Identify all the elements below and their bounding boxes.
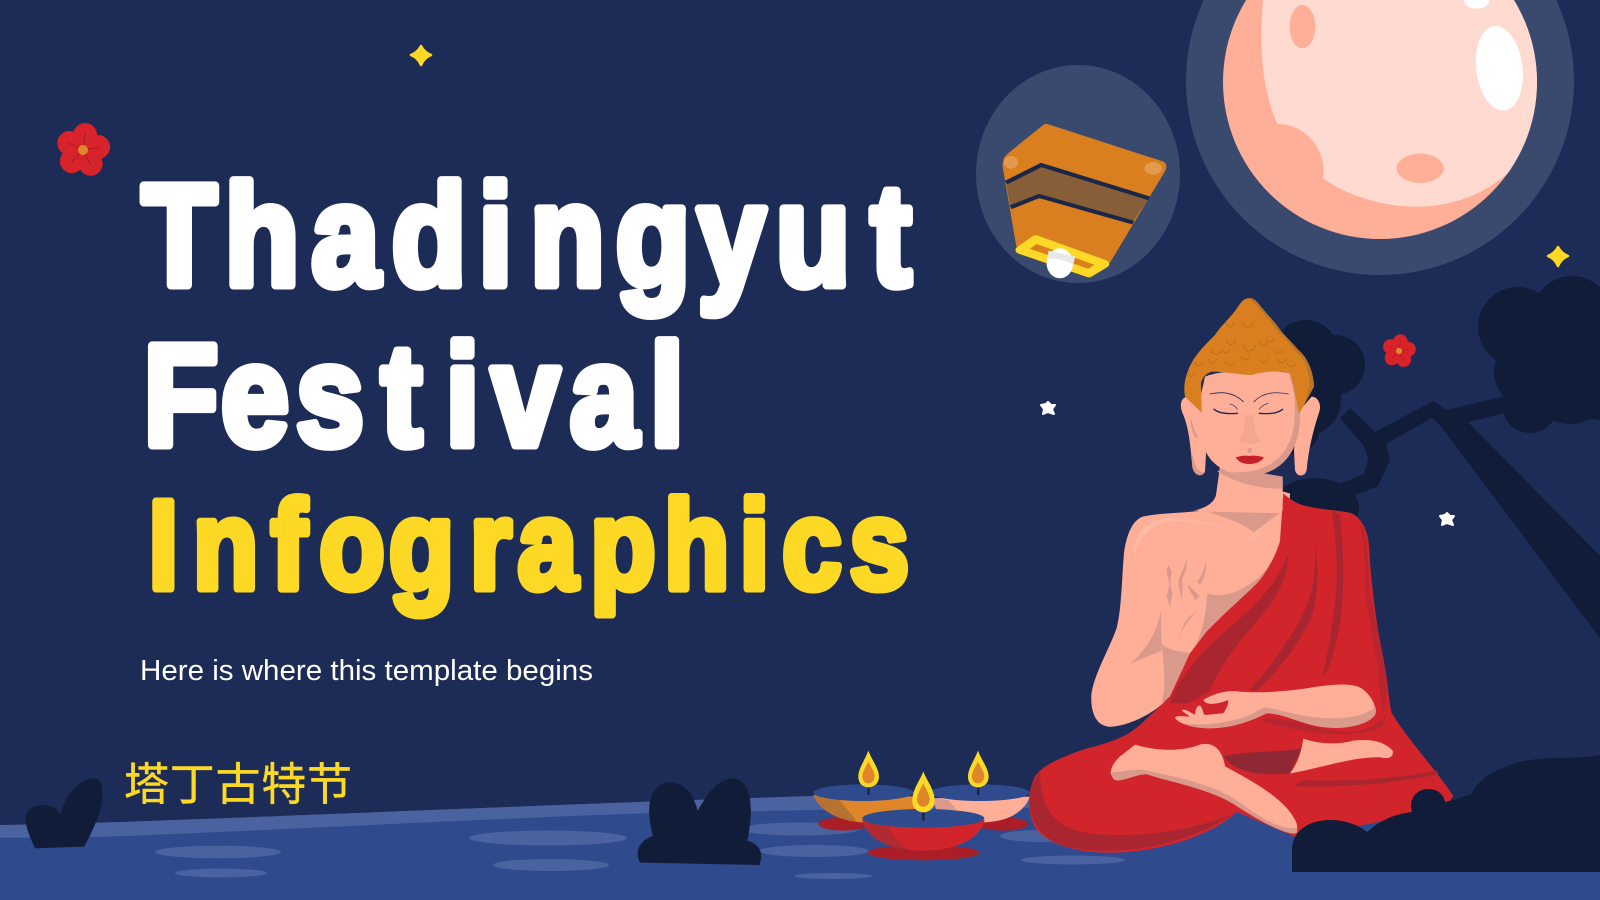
lips [1236, 456, 1264, 464]
lap hand and forearm [1175, 684, 1376, 728]
flower: top left [53, 120, 113, 178]
robe folds: chest drape [1170, 510, 1387, 734]
star: white right [1440, 513, 1454, 525]
robe fold: between legs [1223, 749, 1302, 774]
left leg and foot [1111, 744, 1297, 834]
oil lamps [813, 751, 1030, 860]
bush: left [26, 778, 103, 848]
nose [1238, 415, 1261, 444]
sparkle: yellow right [1548, 247, 1568, 266]
neck [1193, 467, 1283, 511]
bush: middle [638, 778, 761, 865]
subtitle: Here is where this template begins [140, 655, 593, 687]
title: line 3: Infographics [148, 474, 909, 615]
left ear [1181, 397, 1206, 475]
face [1198, 371, 1300, 476]
moon halo [1186, 0, 1574, 275]
hair [1184, 298, 1314, 414]
lamp: right pink [930, 751, 1030, 822]
bush: right [1292, 755, 1600, 872]
title: line 1: Thadingyut [142, 156, 911, 316]
facial features [1210, 393, 1288, 414]
robe [1029, 494, 1453, 853]
water ground [0, 796, 1600, 900]
robe fold: right knee [1293, 770, 1438, 786]
title: line 2: Festival [144, 316, 684, 476]
star: white left [1041, 402, 1055, 414]
finger lines [1167, 559, 1206, 638]
sparkle: yellow top [411, 46, 431, 65]
flower: right [1381, 332, 1418, 368]
chest and arm shading [1130, 512, 1300, 703]
buddha: head [1181, 298, 1320, 511]
torso and raised arm [1091, 474, 1290, 727]
lamp: front red [862, 771, 985, 860]
moon [1186, 0, 1574, 275]
hair curls [1189, 315, 1295, 376]
right ear [1294, 397, 1320, 475]
water ripples [155, 822, 1125, 879]
sky lantern [976, 65, 1180, 283]
tree silhouette [1269, 276, 1600, 638]
buddha: body [1029, 474, 1453, 853]
robe fold: left knee [1029, 770, 1233, 851]
right foot [1290, 739, 1393, 773]
chinese caption: 塔丁古特节 [124, 759, 352, 810]
lamp plate shadows [818, 817, 1028, 831]
lamp: left orange [813, 751, 930, 823]
